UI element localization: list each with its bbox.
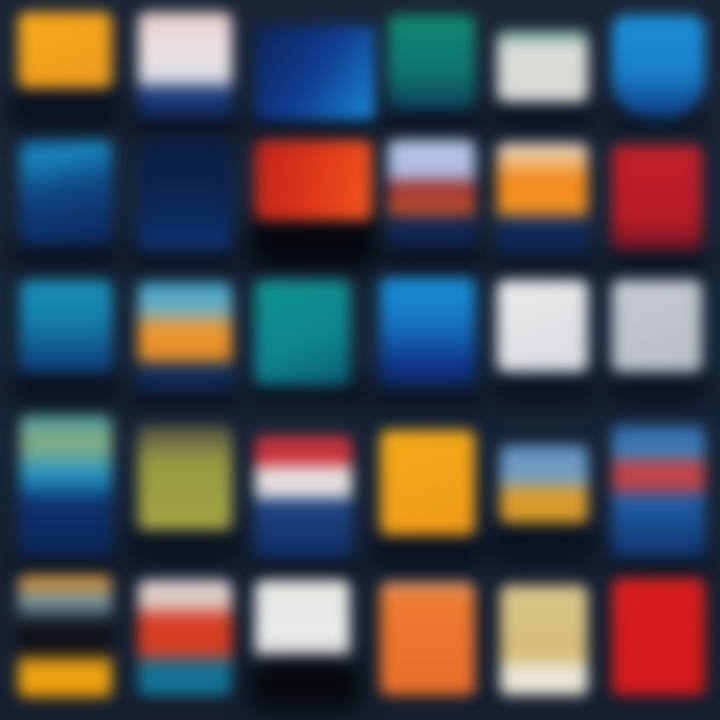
icon: row 1 sky blue tile [612, 15, 705, 118]
icon: row 1 orange tile [18, 12, 112, 88]
icon: row 1 white tile [497, 30, 588, 102]
icon: row 5 tan tile [500, 585, 588, 695]
icon: row 4 amber tile [380, 430, 475, 535]
icon: row 3 teal tile [255, 280, 350, 385]
icon: row 4 blue yellow tile [500, 445, 588, 523]
icon: row 2 red orange tile [255, 140, 372, 220]
icon: row 2 cyan blue tile [20, 140, 112, 245]
icon: row 2 striped tile [388, 140, 475, 245]
icon: row 5 white tile [255, 580, 350, 658]
icon: row 4 red white tile [255, 435, 352, 557]
icon: row 3 blue tile [380, 278, 475, 386]
icon: row 3 white tile [497, 280, 588, 372]
icon: row 5 red white teal tile [138, 580, 232, 695]
icon: row 3 orange band tile [138, 282, 232, 390]
icon: row 4 multicolour tile [20, 415, 112, 555]
icon: row 5 orange tile [380, 582, 475, 695]
icon: row 2 navy tile [138, 140, 232, 250]
icon: row 5 red tile [612, 578, 705, 695]
icon: row 1 white and navy tile [138, 12, 232, 118]
icon: row 4 olive tile [138, 425, 232, 530]
icon: row 3 grey tile [612, 280, 702, 372]
black shadow under white tile [250, 660, 360, 710]
icon: row 3 cyan tile [20, 280, 112, 372]
icon: row 2 red tile [612, 145, 702, 250]
icon: row 4 blue red tile [612, 425, 705, 557]
icon: row 1 blue tile [255, 25, 375, 120]
icon: row 2 orange white tile [497, 143, 588, 253]
icon: row 1 teal tile [388, 15, 475, 110]
icon: row 5 orange black tile [18, 575, 112, 697]
